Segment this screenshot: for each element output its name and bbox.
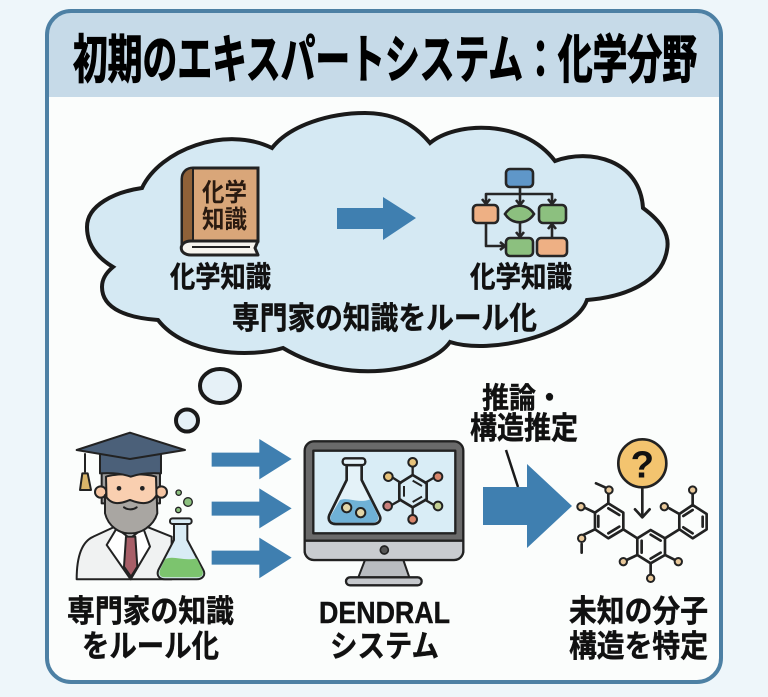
cloud shape [87, 113, 668, 371]
label: expert knowledge: をルール化 [82, 629, 219, 664]
flask [158, 524, 204, 579]
icon: chemistry book: 知識 [202, 206, 247, 234]
lab coat [77, 527, 172, 579]
icon: scientist [77, 433, 204, 579]
screen [313, 451, 455, 533]
icon: DENDRAL computer [305, 441, 463, 585]
label: inference and structure estimation: 推論・ [482, 382, 563, 415]
icon: unknown molecule: ? [631, 443, 654, 486]
stand [358, 560, 409, 577]
icon: chemistry book: 化学 [202, 179, 247, 207]
label: inference and structure estimation: 構造推定 [470, 411, 578, 446]
icon: unknown molecule [577, 439, 707, 582]
label: inference and structure estimation [470, 382, 578, 446]
arrows: knowledge into system [212, 439, 292, 578]
label: DENDRAL system: システム [330, 629, 439, 664]
label: DENDRAL system: DENDRAL [319, 595, 450, 630]
label: identify unknown molecular structure: 未知の分子 [569, 594, 708, 629]
icon: chemistry book [181, 168, 258, 255]
callout line [506, 450, 518, 487]
label: identify unknown molecular structure: 構造を特定 [569, 629, 708, 664]
icon: thought bubbles [176, 369, 240, 432]
arrow: inference [483, 464, 572, 548]
label: chemistry knowledge right: 化学知識 [470, 261, 572, 294]
label: expert knowledge [67, 594, 234, 664]
label: identify unknown molecular structure [569, 594, 708, 664]
label: chemistry knowledge left: 化学知識 [170, 261, 271, 294]
molecule bonds [582, 483, 707, 574]
graduation cap [100, 454, 161, 477]
beard [105, 495, 157, 533]
title: 初期のエキスパートシステム：化学分野 [73, 31, 697, 89]
screen molecule [392, 467, 434, 516]
screen flask [329, 465, 380, 524]
label: expert knowledge: 専門家の知識 [67, 594, 234, 629]
label: DENDRAL system [319, 595, 450, 664]
hair and head [102, 472, 160, 503]
down arrow [635, 488, 650, 517]
arrow: knowledge to rules [337, 197, 416, 240]
monitor body [305, 441, 463, 560]
cloud caption: 専門家の知識をルール化 [232, 301, 537, 336]
icon: rule flowchart [473, 169, 567, 256]
question mark circle [618, 439, 666, 487]
panel: knowledge cloud [87, 113, 668, 371]
